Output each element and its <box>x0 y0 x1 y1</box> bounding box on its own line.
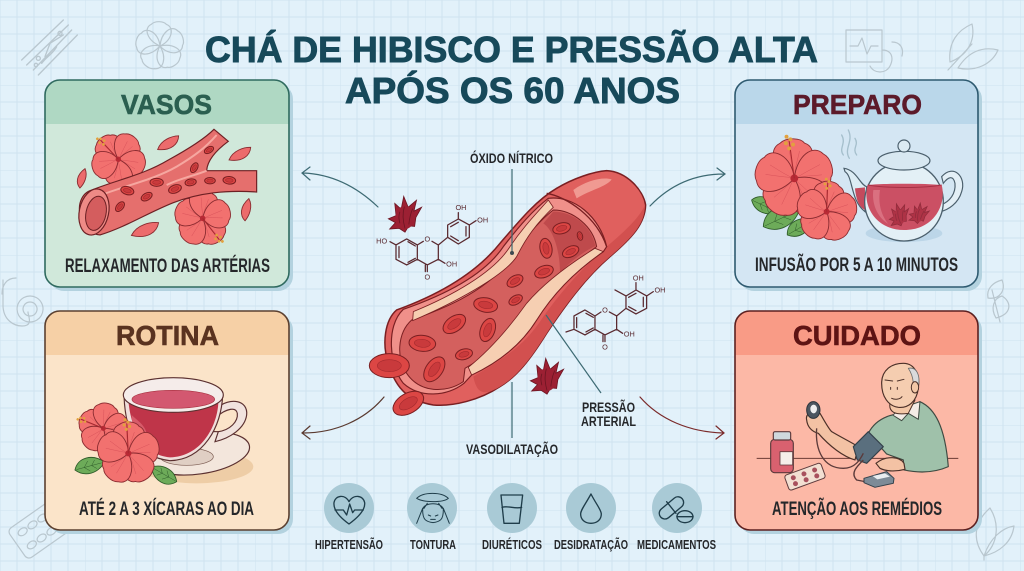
arrow: centre to rotina <box>302 397 384 439</box>
leader: óxido nítrico: ÓXIDO NÍTRICO <box>470 149 553 166</box>
icon: hipertensão <box>315 483 383 552</box>
icon: diuréticos <box>482 483 542 552</box>
icon: desidratação: DESIDRATAÇÃO <box>554 537 628 552</box>
icon: hipertensão: HIPERTENSÃO <box>315 537 383 552</box>
molecule: right flavonoid <box>566 273 665 351</box>
leader: óxido nítrico <box>470 149 553 255</box>
molecule: right flavonoid: O <box>602 306 608 315</box>
molecule: left flavonoid: HO <box>376 236 387 245</box>
leader: pressão arterial: ARTERIAL <box>581 413 636 429</box>
molecule: right flavonoid: O <box>602 342 608 351</box>
arrow: centre to cuidado <box>640 397 724 439</box>
icon: tontura <box>407 483 457 552</box>
illustration: senior measuring blood pressure <box>757 363 958 491</box>
illustration: tea cup with hibiscus <box>65 378 253 491</box>
title: APÓS OS 60 ANOS <box>345 69 680 111</box>
caption: rotina: ATÉ 2 A 3 XÍCARAS AO DIA <box>79 498 254 520</box>
molecule: right flavonoid: OH <box>633 273 644 282</box>
molecule: right flavonoid: OH <box>624 330 635 339</box>
central artery diagram <box>369 171 646 420</box>
leader: vasodilatação: VASODILATAÇÃO <box>466 440 558 457</box>
heading: cuidado: CUIDADO <box>793 320 921 351</box>
panel: vasos <box>45 80 293 291</box>
icon: tontura: TONTURA <box>410 538 456 552</box>
molecule: left flavonoid: OH <box>455 203 466 212</box>
molecule: left flavonoid: O <box>424 272 430 281</box>
red blood cells <box>369 221 584 420</box>
artery body <box>385 171 646 405</box>
icon: diuréticos: DIURÉTICOS <box>482 537 542 552</box>
panel: rotina <box>45 311 293 534</box>
panel: cuidado <box>735 311 982 534</box>
leader: pressão arterial: PRESSÃO <box>582 398 635 415</box>
caption: vasos: RELAXAMENTO DAS ARTÉRIAS <box>65 255 270 277</box>
icon: medicamentos <box>637 483 716 552</box>
arrow: centre to preparo <box>650 168 725 206</box>
arrow: centre to vasos <box>302 167 378 207</box>
heading: rotina: ROTINA <box>116 320 219 351</box>
title <box>205 28 818 111</box>
title: CHÁ DE HIBISCO E PRESSÃO ALTA <box>205 28 818 70</box>
panel: preparo <box>735 80 982 291</box>
molecule: left flavonoid: OH <box>446 260 457 269</box>
molecule: left flavonoid <box>376 203 488 281</box>
icon: hibiscus calyx left <box>388 196 422 232</box>
molecule: left flavonoid: OH <box>477 216 488 225</box>
illustration: hibiscus and teapot <box>749 130 963 251</box>
heading: vasos: VASOS <box>121 89 212 120</box>
icon: hibiscus calyx right <box>530 358 564 394</box>
icon: desidratação <box>554 483 628 552</box>
leader: vasodilatação <box>466 382 558 457</box>
molecule: right flavonoid: OH <box>654 286 665 295</box>
leader: pressão arterial <box>546 315 636 429</box>
illustration: artery with hibiscus <box>73 117 257 261</box>
icon: medicamentos: MEDICAMENTOS <box>637 538 716 552</box>
caption: cuidado: ATENÇÃO AOS REMÉDIOS <box>772 498 942 520</box>
icon row <box>315 483 716 552</box>
heading: preparo: PREPARO <box>793 89 922 120</box>
molecule: left flavonoid: O <box>424 234 430 243</box>
